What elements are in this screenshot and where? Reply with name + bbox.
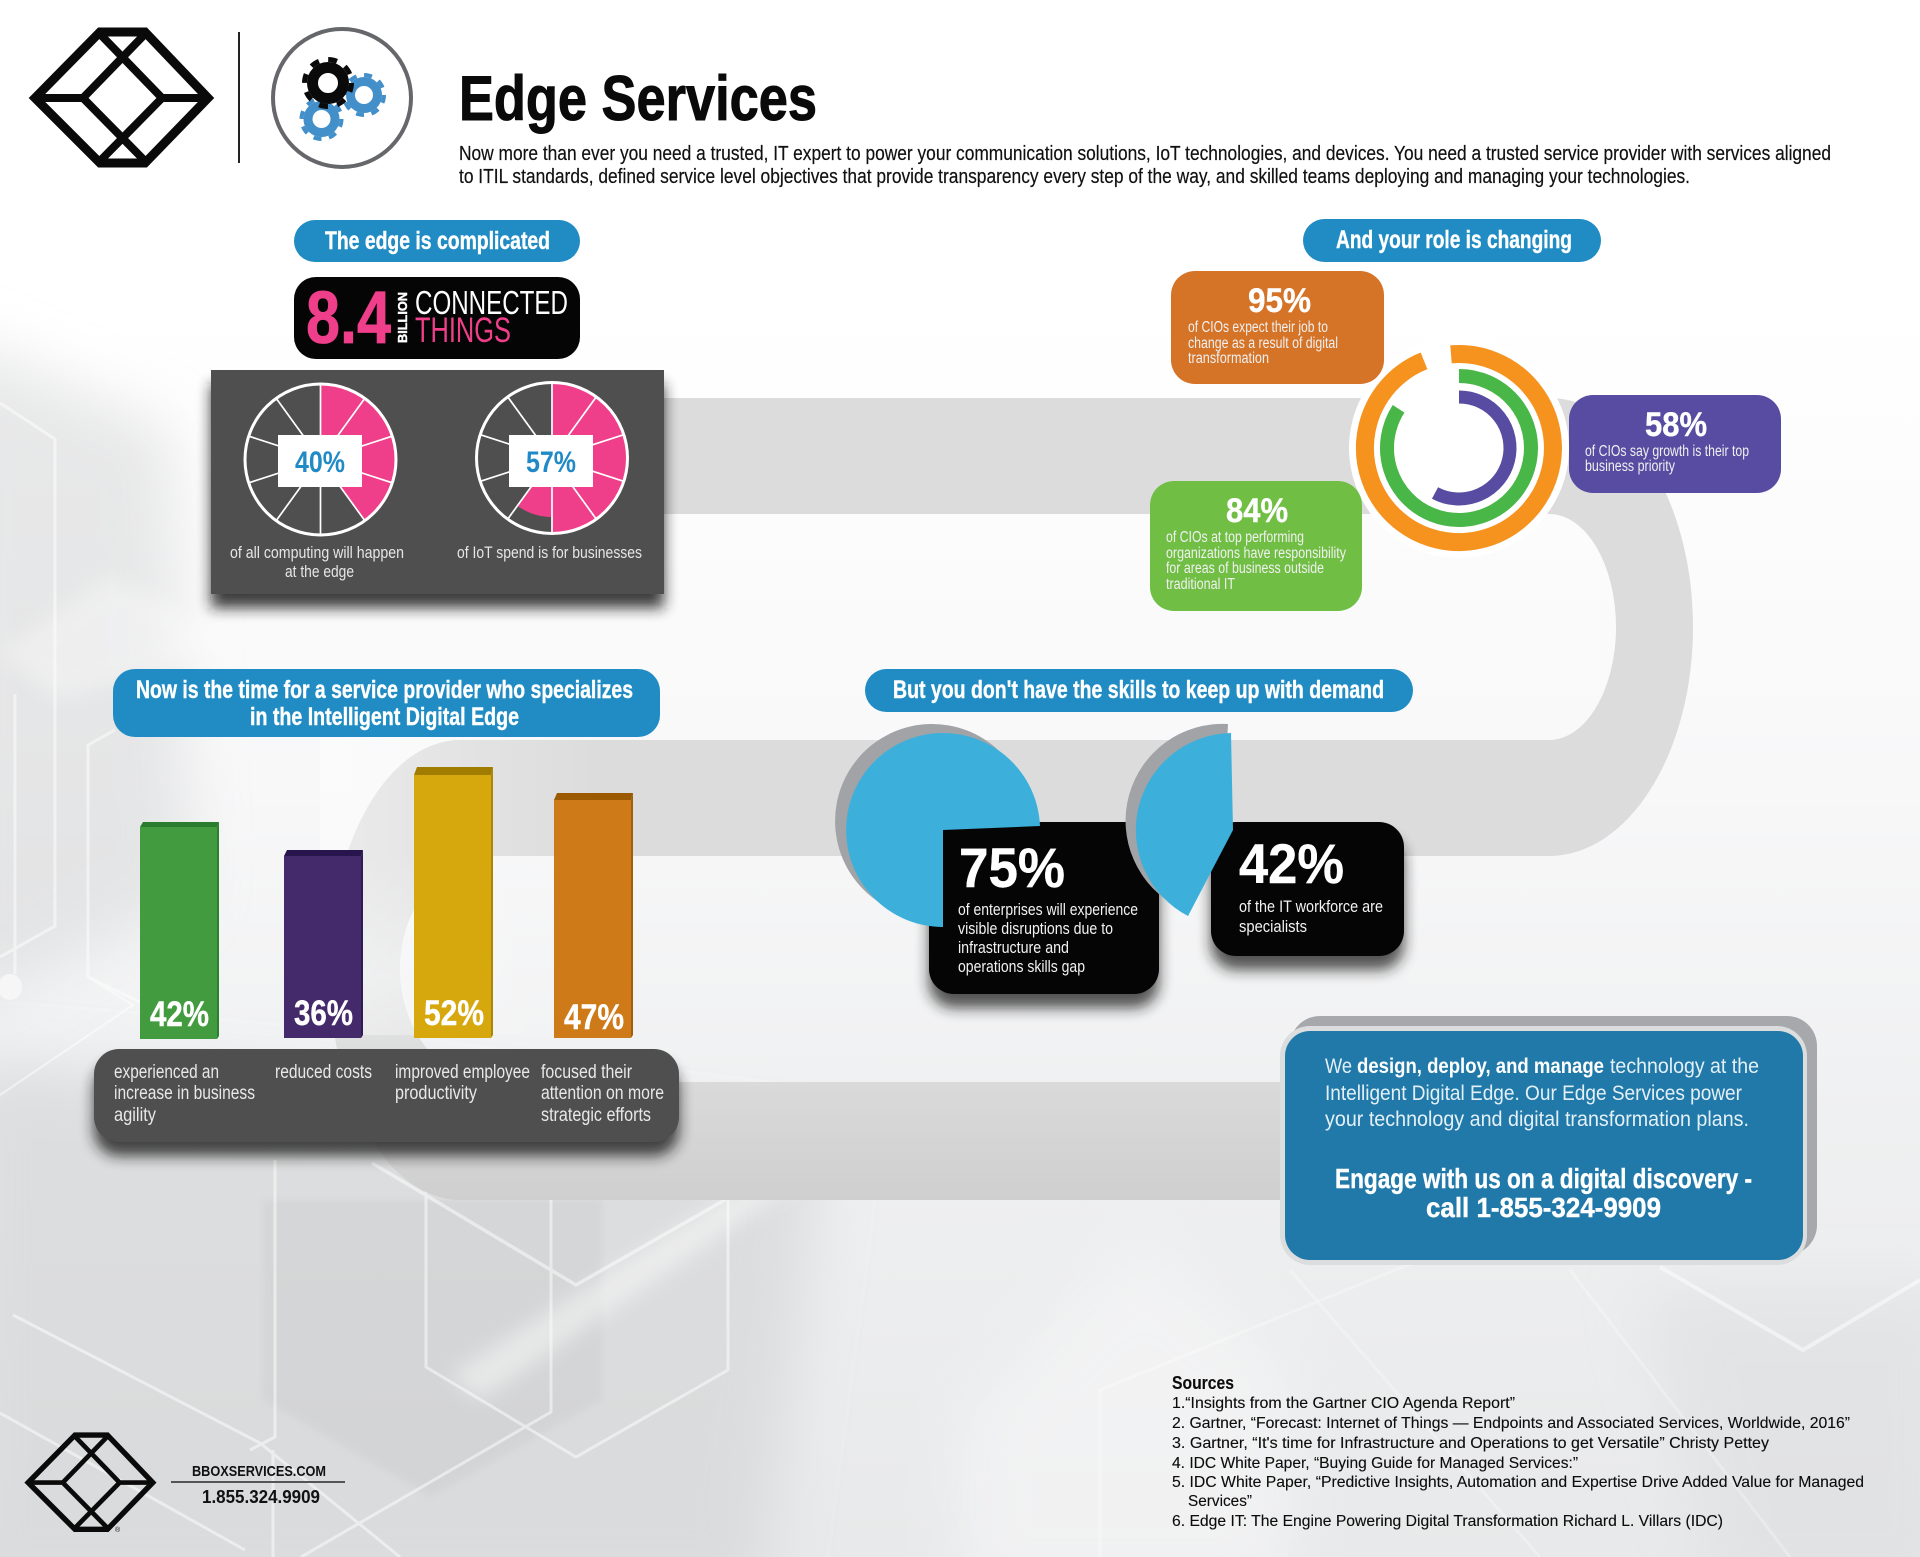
callout: 84 percent: for areas of business outside xyxy=(1166,560,1324,577)
callout: 84 percent xyxy=(1150,481,1362,611)
sources: 1.“Insights from the Gartner CIO Agenda Report” xyxy=(1172,1395,1515,1412)
heading: skills xyxy=(865,669,1413,712)
callout: 58 percent: 58% xyxy=(1645,406,1707,444)
intro text: to ITIL standards, defined service level objectives that provide transparency every step of the way, and skilled teams deploying and managing your technologies. xyxy=(459,166,1690,188)
panel: bar labels xyxy=(94,1049,679,1156)
call to action panel: We xyxy=(1325,1055,1352,1078)
label: business agility xyxy=(114,1062,255,1126)
label: employee productivity: improved employee xyxy=(395,1062,530,1083)
card: 75 percent xyxy=(835,724,1159,1008)
callout: 84 percent: 84% xyxy=(1226,492,1288,530)
pie: 42 percent xyxy=(1126,724,1233,916)
callout: 58 percent: business priority xyxy=(1585,458,1675,475)
sources: 4. IDC White Paper, “Buying Guide for Managed Services:” xyxy=(1172,1455,1578,1472)
call to action panel: call 1-855-324-9909 xyxy=(1426,1192,1661,1223)
label: strategic efforts: strategic efforts xyxy=(541,1105,651,1126)
label: employee productivity: productivity xyxy=(395,1083,477,1104)
call to action panel xyxy=(1280,1016,1817,1265)
caption: 57 percent: of IoT spend is for businesses xyxy=(457,543,642,562)
donut: 40 percent: 40% xyxy=(295,446,345,479)
footer contact: 1.855.324.9909 xyxy=(202,1487,320,1507)
callout: 58 percent xyxy=(1569,395,1781,493)
callout: 95 percent: of CIOs expect their job to xyxy=(1188,319,1328,336)
chart: concentric rings xyxy=(1349,338,1569,558)
footer logo: ® xyxy=(115,1526,121,1534)
divider xyxy=(238,32,240,163)
icon: gears in circle xyxy=(273,29,411,167)
heading: and your role is changing xyxy=(1303,219,1601,262)
card: 42 percent: specialists xyxy=(1239,917,1307,936)
call to action panel: Engage with us on a digital discovery - xyxy=(1335,1163,1752,1194)
heading: service provider: in the Intelligent Digital Edge xyxy=(250,703,519,731)
card: 42 percent: of the IT workforce are xyxy=(1239,897,1383,916)
footer contact xyxy=(171,1463,345,1507)
bar: 36 percent: 36% xyxy=(294,994,353,1033)
footer contact: BBOXSERVICES.COM xyxy=(192,1463,326,1480)
stat: 8.4 billion connected things xyxy=(294,276,580,359)
donut: 40 percent xyxy=(245,384,396,535)
title: Edge Services xyxy=(459,64,817,134)
stat: 8.4 billion connected things: BILLION xyxy=(395,292,410,343)
callout: 84 percent: organizations have responsibility xyxy=(1166,545,1346,562)
sources: 6. Edge IT: The Engine Powering Digital Transformation Richard L. Villars (IDC) xyxy=(1172,1513,1723,1530)
label: strategic efforts xyxy=(541,1062,664,1126)
label: strategic efforts: attention on more xyxy=(541,1083,664,1104)
footer logo xyxy=(28,1435,153,1534)
heading: skills: But you don't have the skills to keep up with demand xyxy=(893,676,1384,704)
card: 42 percent xyxy=(1126,724,1404,970)
call to action panel: Intelligent Digital Edge. Our Edge Services power xyxy=(1325,1082,1742,1105)
card: 75 percent: of enterprises will experience xyxy=(958,900,1138,919)
pie: 75 percent xyxy=(835,724,1040,927)
bar chart: benefits xyxy=(140,767,633,1039)
label: employee productivity xyxy=(395,1062,530,1104)
label: business agility: agility xyxy=(114,1105,156,1126)
donut: 57 percent xyxy=(476,382,628,534)
sources: 2. Gartner, “Forecast: Internet of Things — Endpoints and Associated Services, Worldwide, 2016” xyxy=(1172,1415,1850,1432)
label: strategic efforts: focused their xyxy=(541,1062,633,1083)
callout: 84 percent: of CIOs at top performing xyxy=(1166,529,1304,546)
card: 75 percent: 75% xyxy=(959,836,1065,899)
callout: 58 percent: of CIOs say growth is their top xyxy=(1585,443,1749,460)
bar: 36 percent xyxy=(284,850,363,1038)
callout: 95 percent xyxy=(1171,271,1384,384)
card: 75 percent: operations skills gap xyxy=(958,957,1085,976)
label: business agility: experienced an xyxy=(114,1062,219,1083)
bar: 47 percent xyxy=(554,793,633,1038)
intro text xyxy=(459,143,1831,188)
stat: 8.4 billion connected things: CONNECTED xyxy=(415,284,568,321)
stat: 8.4 billion connected things: 8.4 xyxy=(306,276,391,359)
label: reduced costs: reduced costs xyxy=(275,1062,372,1083)
card: 75 percent: infrastructure and xyxy=(958,938,1069,957)
call to action panel: design, deploy, and manage xyxy=(1357,1055,1604,1078)
caption: 40 percent: of all computing will happen xyxy=(230,543,404,562)
callout: 84 percent: traditional IT xyxy=(1166,576,1235,593)
bar: 42 percent: 42% xyxy=(150,995,209,1034)
heading: and your role is changing: And your role is changing xyxy=(1336,226,1572,254)
heading: service provider xyxy=(113,669,660,737)
donut: 57 percent: 57% xyxy=(526,446,576,479)
sources: Services” xyxy=(1188,1493,1252,1510)
bar: 42 percent xyxy=(140,822,219,1039)
caption: 40 percent xyxy=(230,543,404,581)
bar: 47 percent: 47% xyxy=(564,998,624,1037)
callout: 95 percent: transformation xyxy=(1188,350,1269,367)
sources: 3. Gartner, “It's time for Infrastructure and Operations to get Versatile” Christy Pettey xyxy=(1172,1435,1769,1452)
heading: the edge is complicated xyxy=(294,220,580,262)
panel: computing and IoT spend xyxy=(211,370,664,608)
heading: service provider: Now is the time for a service provider who specializes xyxy=(136,676,633,704)
bar: 52 percent xyxy=(414,767,493,1038)
caption: 40 percent: at the edge xyxy=(285,562,354,581)
sources xyxy=(1172,1373,1864,1530)
call to action panel: technology at the xyxy=(1610,1055,1759,1078)
stat: 8.4 billion connected things: THINGS xyxy=(415,311,511,350)
callout: 95 percent: change as a result of digital xyxy=(1188,335,1338,352)
bar: 52 percent: 52% xyxy=(424,994,484,1033)
heading: the edge is complicated: The edge is complicated xyxy=(325,227,550,255)
grey winding road xyxy=(320,398,1693,1200)
header logo xyxy=(35,32,208,163)
card: 42 percent: 42% xyxy=(1239,832,1344,895)
sources: 5. IDC White Paper, “Predictive Insights, Automation and Expertise Drive Added Value for Managed xyxy=(1172,1474,1864,1491)
label: business agility: increase in business xyxy=(114,1083,255,1104)
sources: Sources xyxy=(1172,1373,1234,1393)
card: 75 percent: visible disruptions due to xyxy=(958,919,1113,938)
callout: 95 percent: 95% xyxy=(1248,282,1311,320)
call to action panel: your technology and digital transformation plans. xyxy=(1325,1108,1749,1131)
